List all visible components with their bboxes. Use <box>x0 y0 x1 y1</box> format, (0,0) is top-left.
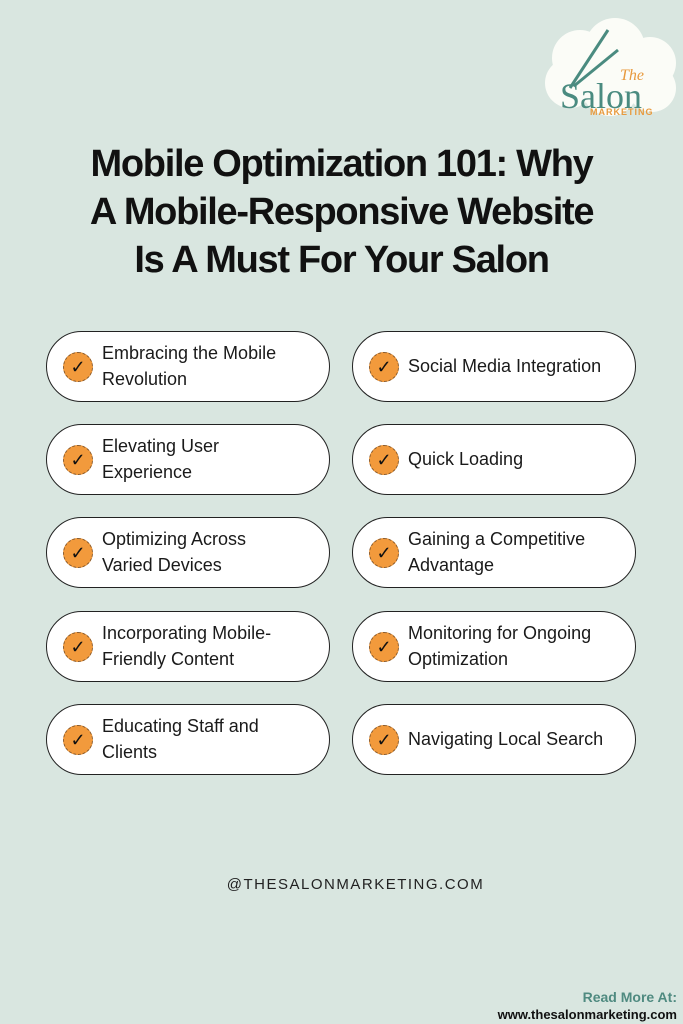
title: A Mobile-Responsive Website <box>90 191 593 233</box>
pill: Optimizing: Optimizing Across <box>102 529 246 549</box>
pill: Optimizing: ✓ <box>70 543 86 563</box>
pill: Elevating: Elevating User <box>102 436 219 456</box>
logo: cloud: Salon <box>560 76 642 116</box>
pill: Local Search: Navigating Local Search <box>408 729 603 749</box>
pill: Educating: Clients <box>102 742 157 762</box>
pill: Optimizing <box>46 517 330 588</box>
pill: Competitive: Advantage <box>408 555 494 575</box>
pill: Embracing <box>46 331 330 402</box>
logo: cloud: MARKETING <box>590 107 654 117</box>
title <box>90 143 594 281</box>
pill: Elevating: ✓ <box>70 450 86 470</box>
pill: Monitoring: ✓ <box>376 637 392 657</box>
pill: Incorporating: Incorporating Mobile- <box>102 623 271 643</box>
pill: Incorporating: ✓ <box>70 637 86 657</box>
pill: Competitive: ✓ <box>376 543 392 563</box>
pill: Quick Loading: Quick Loading <box>408 449 523 469</box>
pill: Monitoring: Optimization <box>408 649 508 669</box>
pill: Incorporating <box>46 611 330 682</box>
pill: Social Media: ✓ <box>376 357 392 377</box>
read more: www.thesalonmarketing.com <box>498 1007 677 1022</box>
pill: Optimizing: Varied Devices <box>102 555 222 575</box>
pill: Embracing: ✓ <box>70 357 86 377</box>
title: Is A Must For Your Salon <box>134 239 549 281</box>
pill: Quick Loading: ✓ <box>376 450 392 470</box>
pill: Elevating: Experience <box>102 462 192 482</box>
handle: @THESALONMARKETING.COM <box>227 876 484 893</box>
pill: Embracing: Embracing the Mobile Revolution <box>102 343 276 389</box>
pill: Educating: ✓ <box>70 730 86 750</box>
logo: cloud: The <box>620 67 644 84</box>
pill: Competitive <box>352 517 636 588</box>
logo: cloud <box>545 18 676 117</box>
pill: Social Media <box>352 331 636 402</box>
pill: Educating: Educating Staff and <box>102 716 259 736</box>
pill: Local Search: ✓ <box>376 730 392 750</box>
pill: Incorporating: Friendly Content <box>102 649 234 669</box>
pill: Monitoring <box>352 611 636 682</box>
pill: Monitoring: Monitoring for Ongoing <box>408 623 591 643</box>
title: Mobile Optimization 101: Why <box>91 143 592 185</box>
pill: Social Media: Social Media Integration <box>408 356 601 376</box>
pill: Quick Loading <box>352 424 636 495</box>
read more: Read More At: <box>583 989 677 1005</box>
pill: Elevating <box>46 424 330 495</box>
pill: Local Search <box>352 704 636 775</box>
pill: Competitive: Gaining a Competitive <box>408 529 585 549</box>
pill: Educating <box>46 704 330 775</box>
read more <box>498 989 677 1022</box>
